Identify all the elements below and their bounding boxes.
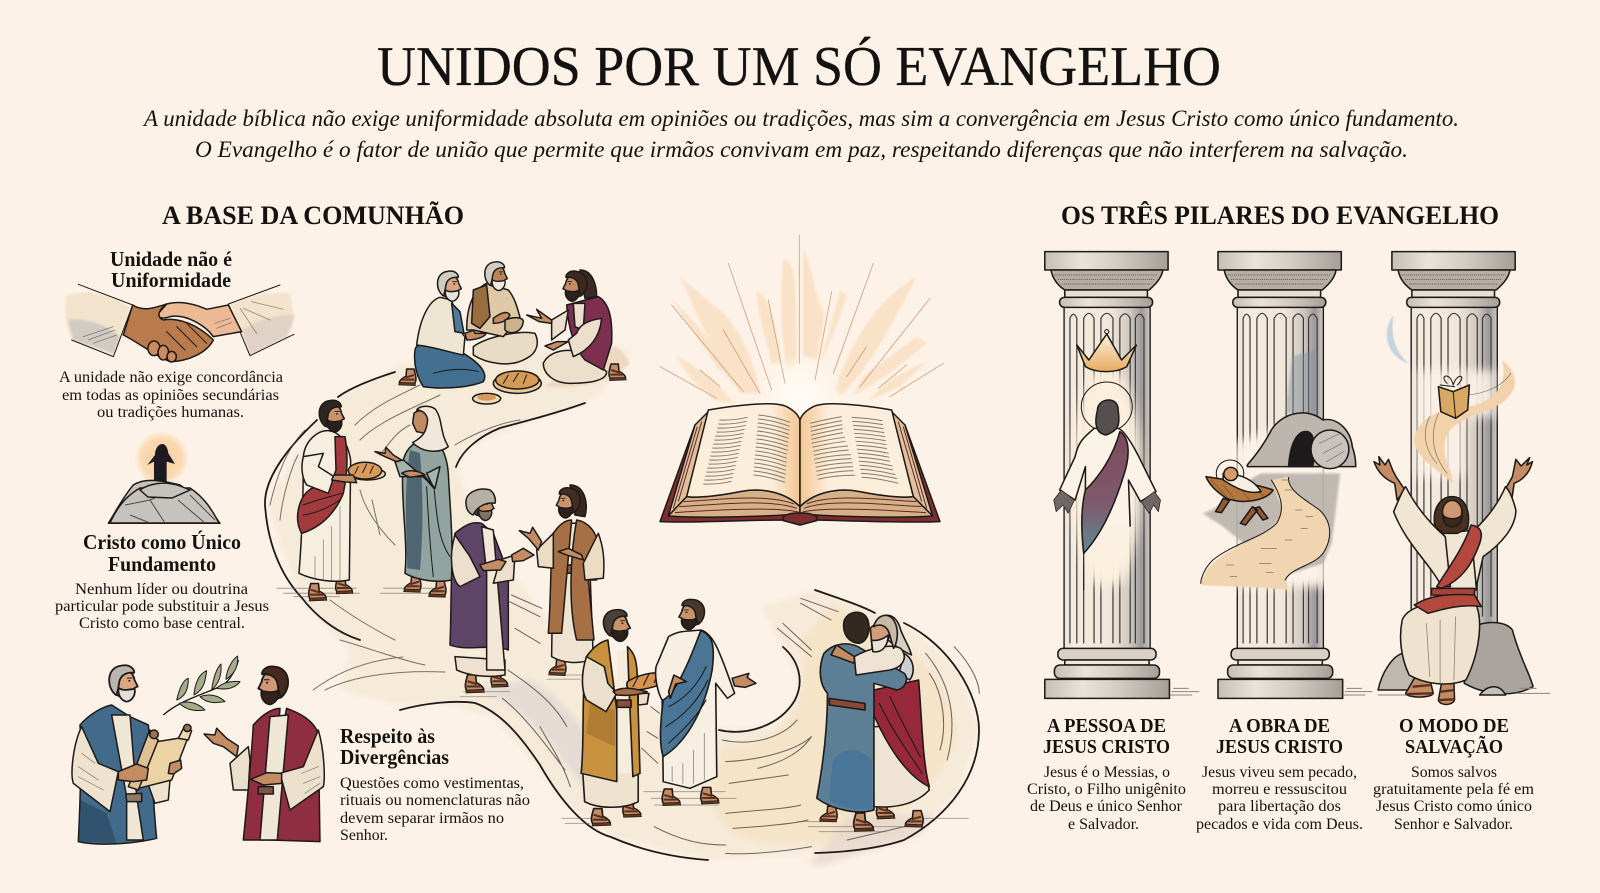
- block: respeito às divergências: [340, 724, 530, 844]
- pillar text: o modo de salvação: [1373, 715, 1534, 833]
- block: cristo como único fundamento: Fundamento: [108, 552, 216, 576]
- block: unidade não é uniformidade: ou tradições humanas.: [97, 404, 244, 421]
- pillar text: o modo de salvação: Senhor e Salvador.: [1394, 816, 1513, 833]
- block: cristo como único fundamento: [55, 530, 269, 632]
- pillar text: o modo de salvação: gratuitamente pela fé em: [1373, 781, 1534, 798]
- pillar: a obra de Jesus Cristo: [1201, 252, 1372, 698]
- pillar text: o modo de salvação: Jesus Cristo como único: [1376, 798, 1532, 815]
- icon: Christ on rock: [108, 432, 220, 523]
- icon: open book with rays: [660, 235, 943, 525]
- pillar text: a pessoa de Jesus Cristo: e Salvador.: [1068, 816, 1139, 833]
- heading: a base da comunhão: A BASE DA COMUNHÃO: [162, 201, 464, 230]
- block: respeito às divergências: rituais ou nomenclaturas não: [340, 792, 530, 809]
- pillar text: a obra de Jesus Cristo: [1196, 715, 1363, 833]
- pillar text: a obra de Jesus Cristo: pecados e vida com Deus.: [1196, 816, 1363, 833]
- rock base continuation: [110, 483, 219, 523]
- heading: os três pilares: OS TRÊS PILARES DO EVANGELHO: [1061, 201, 1499, 230]
- block: respeito às divergências: Respeito às: [340, 724, 435, 748]
- block: respeito às divergências: devem separar irmãos no: [340, 810, 504, 827]
- pillar text: a pessoa de Jesus Cristo: Jesus é o Messias, o: [1044, 764, 1170, 781]
- pillar text: a pessoa de Jesus Cristo: [1027, 715, 1186, 833]
- pillar text: a obra de Jesus Cristo: Jesus viveu sem pecado,: [1202, 764, 1357, 781]
- pillar text: a pessoa de Jesus Cristo: JESUS CRISTO: [1043, 736, 1170, 758]
- icon: handshake: [65, 284, 295, 362]
- subtitle: [142, 106, 1459, 162]
- block: unidade não é uniformidade: Uniformidade: [111, 268, 231, 292]
- pillar text: o modo de salvação: Somos salvos: [1411, 764, 1497, 781]
- title: UNIDOS POR UM SÓ EVANGELHO: [377, 35, 1221, 98]
- subtitle: O Evangelho é o fator de união que permite que irmãos convivam em paz, respeitando diferenças que não interferem na salvação.: [195, 137, 1408, 162]
- pillar text: a pessoa de Jesus Cristo: A PESSOA DE: [1047, 715, 1166, 737]
- scene: man in maroon: [204, 667, 324, 842]
- scene: two men embracing: [797, 612, 969, 832]
- pillar: a pessoa de Jesus Cristo: [1045, 252, 1199, 698]
- pillar: o modo de salvação: [1374, 252, 1550, 704]
- pillar text: a obra de Jesus Cristo: morreu e ressuscitou: [1212, 781, 1347, 798]
- scene: man with bread and man with blue sash: [561, 599, 756, 826]
- pillar text: a obra de Jesus Cristo: JESUS CRISTO: [1216, 736, 1343, 758]
- scene: man offers bread to woman: [277, 400, 452, 601]
- pillar text: o modo de salvação: SALVAÇÃO: [1405, 735, 1503, 758]
- scene: elder with scroll: [72, 665, 192, 844]
- block: unidade não é uniformidade: em todas as opiniões secundárias: [62, 387, 279, 404]
- block: unidade não é uniformidade: [59, 247, 283, 421]
- scene: two men in conversation: [450, 485, 604, 697]
- block: respeito às divergências: Questões como vestimentas,: [340, 775, 524, 792]
- subtitle: A unidade bíblica não exige uniformidade absoluta em opiniões ou tradições, mas sim a convergência em Jesus Cristo como único fundamento.: [142, 106, 1459, 131]
- block: cristo como único fundamento: Nenhum líder ou doutrina: [75, 581, 248, 598]
- block: cristo como único fundamento: particular pode substituir a Jesus: [55, 598, 269, 615]
- icon: olive branch: [163, 656, 240, 715]
- winding path of unity: [265, 345, 979, 866]
- block: unidade não é uniformidade: Unidade não é: [110, 247, 232, 271]
- block: cristo como único fundamento: Cristo como base central.: [79, 615, 245, 632]
- block: respeito às divergências: Senhor.: [340, 827, 388, 844]
- scene: three seated disciples sharing bread: [399, 262, 630, 404]
- pillar text: a obra de Jesus Cristo: para libertação dos: [1218, 798, 1341, 815]
- block: respeito às divergências: Divergências: [340, 745, 449, 769]
- block: cristo como único fundamento: Cristo como Único: [83, 530, 241, 554]
- pillar text: o modo de salvação: O MODO DE: [1399, 715, 1509, 737]
- pillar text: a obra de Jesus Cristo: A OBRA DE: [1229, 715, 1330, 737]
- pillar text: a pessoa de Jesus Cristo: Cristo, o Filho unigênito: [1027, 781, 1186, 798]
- pillar text: a pessoa de Jesus Cristo: de Deus e único Senhor: [1030, 798, 1183, 815]
- block: unidade não é uniformidade: A unidade não exige concordância: [59, 369, 283, 386]
